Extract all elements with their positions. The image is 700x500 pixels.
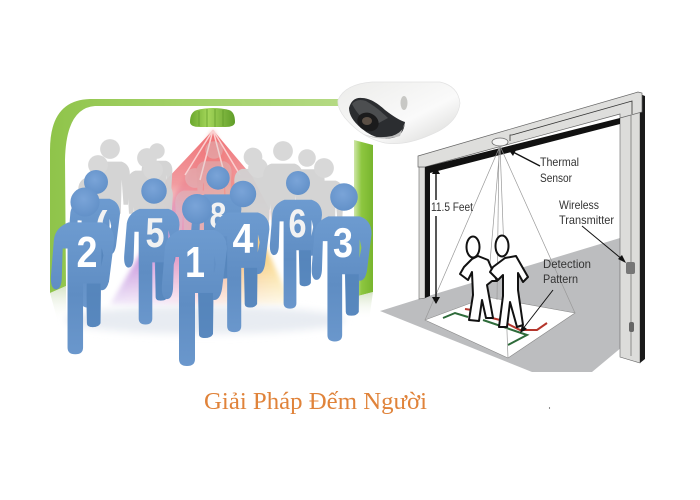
dome security camera <box>338 82 460 144</box>
stray dot <box>549 407 550 409</box>
person 7 <box>68 170 120 308</box>
person 2 <box>51 187 114 354</box>
arrow to thermal sensor <box>508 149 540 166</box>
label: Detection Pattern: Pattern <box>543 272 578 286</box>
thermal sensor door diagram <box>380 92 645 372</box>
left door post <box>419 166 430 299</box>
person 5 <box>124 178 180 324</box>
infographic canvas <box>50 82 645 414</box>
person 6 <box>270 171 322 309</box>
walking figure left <box>460 236 497 321</box>
door header <box>418 92 642 173</box>
person 6: 6 <box>288 202 306 246</box>
green door frame <box>50 99 373 322</box>
translucent figures inside the beam <box>175 141 232 243</box>
arrow to wireless transmitter <box>582 226 626 263</box>
floor reflection <box>65 306 345 334</box>
label: Wireless Transmitter: Transmitter <box>559 213 614 227</box>
detection cone lines <box>425 146 575 358</box>
person 5: 5 <box>146 209 164 256</box>
person 8 <box>191 166 241 300</box>
arrow to detection pattern <box>520 290 553 333</box>
person 4 <box>212 181 269 332</box>
label: Thermal Sensor: Thermal <box>540 155 579 169</box>
right door post <box>620 94 645 363</box>
person 2: 2 <box>76 228 98 277</box>
label: Wireless Transmitter: Wireless <box>559 198 599 212</box>
sensor beam cone <box>110 130 292 305</box>
height arrow <box>432 167 440 304</box>
person 3 <box>312 183 372 341</box>
green ceiling sensor <box>190 108 235 127</box>
detection floor pattern <box>425 297 575 358</box>
person 1 <box>162 194 227 366</box>
person 7: 7 <box>92 193 112 234</box>
grey background crowd <box>78 139 344 235</box>
person 3: 3 <box>333 219 353 266</box>
walking figure right <box>490 236 528 327</box>
label: Detection Pattern: Detection <box>543 257 591 271</box>
label: 11.5 Feet: 11.5 Feet <box>431 200 474 214</box>
person 8: 8 <box>210 195 226 236</box>
person 1: 1 <box>185 238 205 287</box>
person 4: 4 <box>232 215 254 262</box>
floor <box>380 238 622 372</box>
people counting illustration <box>50 99 373 366</box>
title: Giải Pháp Đếm Người <box>204 389 427 415</box>
label: Thermal Sensor: Sensor <box>540 171 572 185</box>
